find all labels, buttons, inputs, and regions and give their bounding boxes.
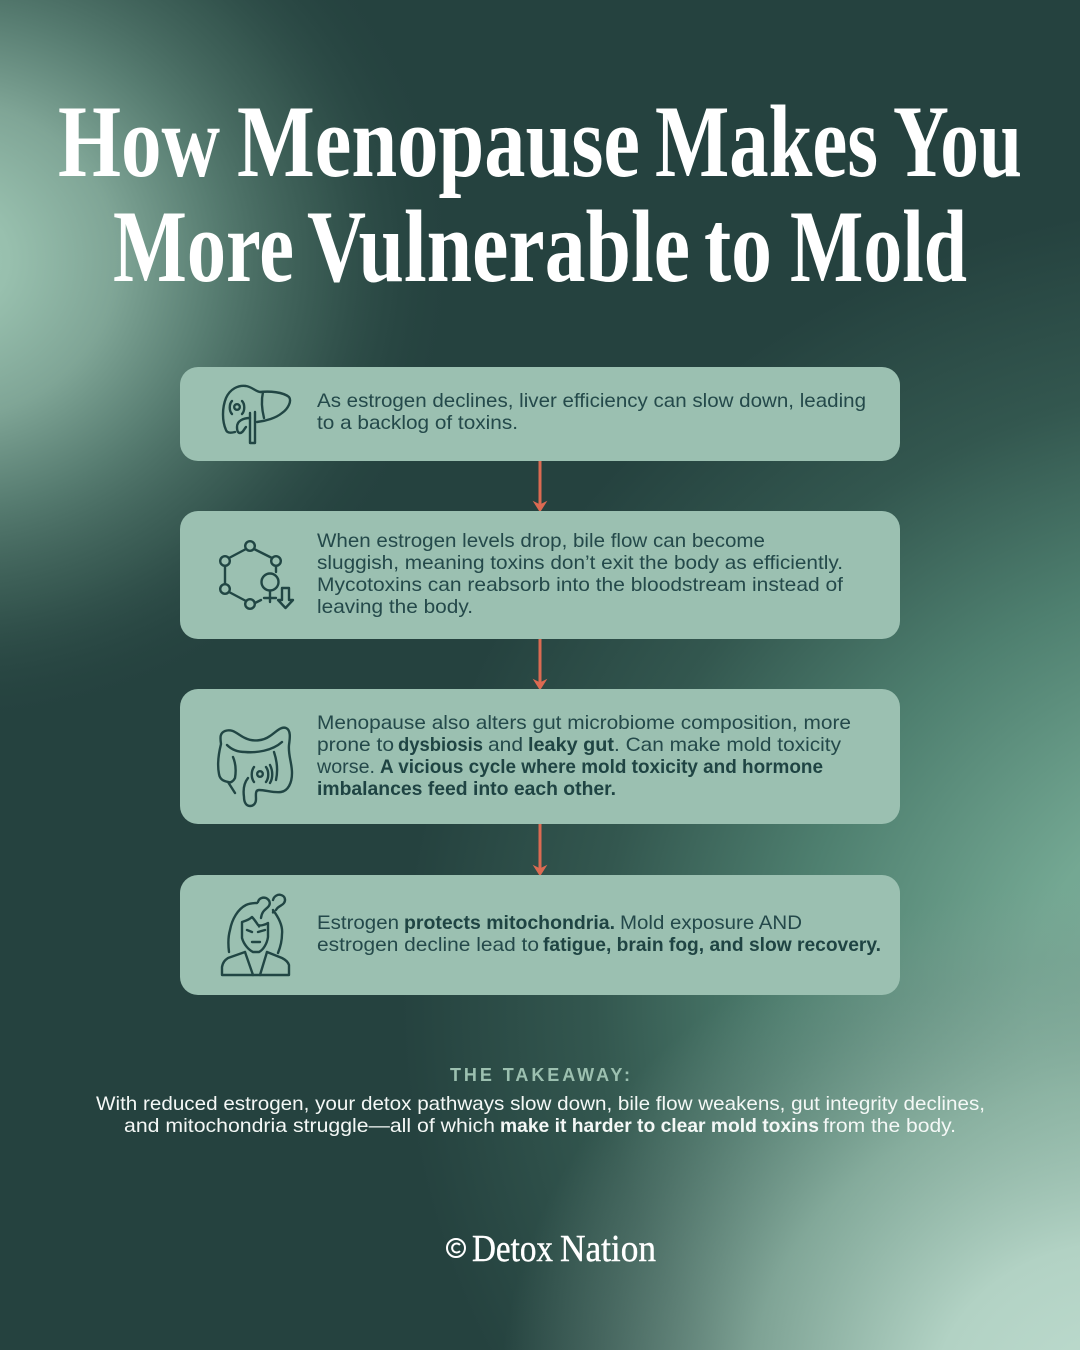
icon: liver — [223, 386, 290, 443]
title: More — [113, 190, 294, 304]
takeaway text: make it harder to clear mold toxins — [500, 1115, 819, 1137]
text: gut microbiome: and — [488, 734, 523, 756]
panel: liver efficiency — [180, 367, 900, 461]
takeaway heading: THE TAKEAWAY: — [450, 1065, 630, 1085]
text: gut microbiome: A vicious cycle where mold toxicity and hormone — [380, 756, 823, 778]
title: Makes — [655, 85, 878, 199]
icon: hexagon molecule with female symbol and down arrow — [220, 541, 293, 609]
text: bile flow: sluggish, meaning toxins don’t exit the body as efficiently. — [317, 552, 843, 574]
title: Mold — [790, 190, 967, 304]
title: How — [58, 85, 220, 199]
arrow: card 3 to card 4 — [534, 824, 546, 876]
text: mitochondria: Estrogen — [317, 912, 399, 934]
text: gut microbiome: . Can make mold toxicity — [614, 734, 841, 756]
panel: mitochondria — [180, 875, 900, 995]
arrow: card 1 to card 2 — [534, 461, 546, 512]
text: mitochondria: Mold exposure AND — [620, 912, 802, 934]
text: bile flow: leaving the body. — [317, 596, 473, 618]
logo: Detox Nation — [447, 1228, 656, 1270]
icon: woman with question marks — [222, 895, 289, 975]
text: mitochondria: fatigue, brain fog, and slow recovery. — [543, 934, 881, 956]
icon: intestines — [218, 728, 292, 806]
text: bile flow: When estrogen levels drop, bile flow can become — [317, 530, 765, 552]
arrow: card 2 to card 3 — [534, 639, 546, 690]
title: You — [893, 85, 1022, 199]
text: mitochondria — [317, 912, 881, 956]
takeaway text: and mitochondria struggle—all of which — [124, 1115, 495, 1137]
takeaway text: from the body. — [823, 1115, 956, 1137]
text: gut microbiome: Menopause also alters gut microbiome composition, more — [317, 712, 851, 734]
text: mitochondria: estrogen decline lead to — [317, 934, 539, 956]
title — [58, 85, 1022, 304]
text: liver efficiency: As estrogen declines, liver efficiency can slow down, leading — [317, 390, 866, 412]
text: liver efficiency: to a backlog of toxins. — [317, 412, 518, 434]
logo: Detox Nation: Detox — [472, 1228, 553, 1270]
text: gut microbiome: leaky gut — [528, 734, 614, 756]
text: gut microbiome: prone to — [317, 734, 394, 756]
text: gut microbiome: dysbiosis — [398, 734, 483, 756]
title: Vulnerable — [307, 190, 690, 304]
panel: gut microbiome — [180, 689, 900, 824]
text: gut microbiome: worse. — [316, 756, 375, 778]
title: Menopause — [237, 85, 640, 199]
text: bile flow — [317, 530, 844, 618]
logo: Detox Nation: Nation — [560, 1228, 656, 1270]
text: mitochondria: protects mitochondria. — [404, 912, 615, 934]
panel: bile flow — [180, 511, 900, 639]
title: to — [704, 190, 772, 304]
text: gut microbiome: imbalances feed into each other. — [317, 778, 616, 800]
text: liver efficiency — [317, 390, 866, 434]
text: bile flow: Mycotoxins can reabsorb into the bloodstream instead of — [317, 574, 844, 596]
text: gut microbiome — [316, 712, 851, 800]
takeaway text — [96, 1093, 985, 1137]
takeaway text: With reduced estrogen, your detox pathways slow down, bile flow weakens, gut integrity declines, — [96, 1093, 985, 1115]
